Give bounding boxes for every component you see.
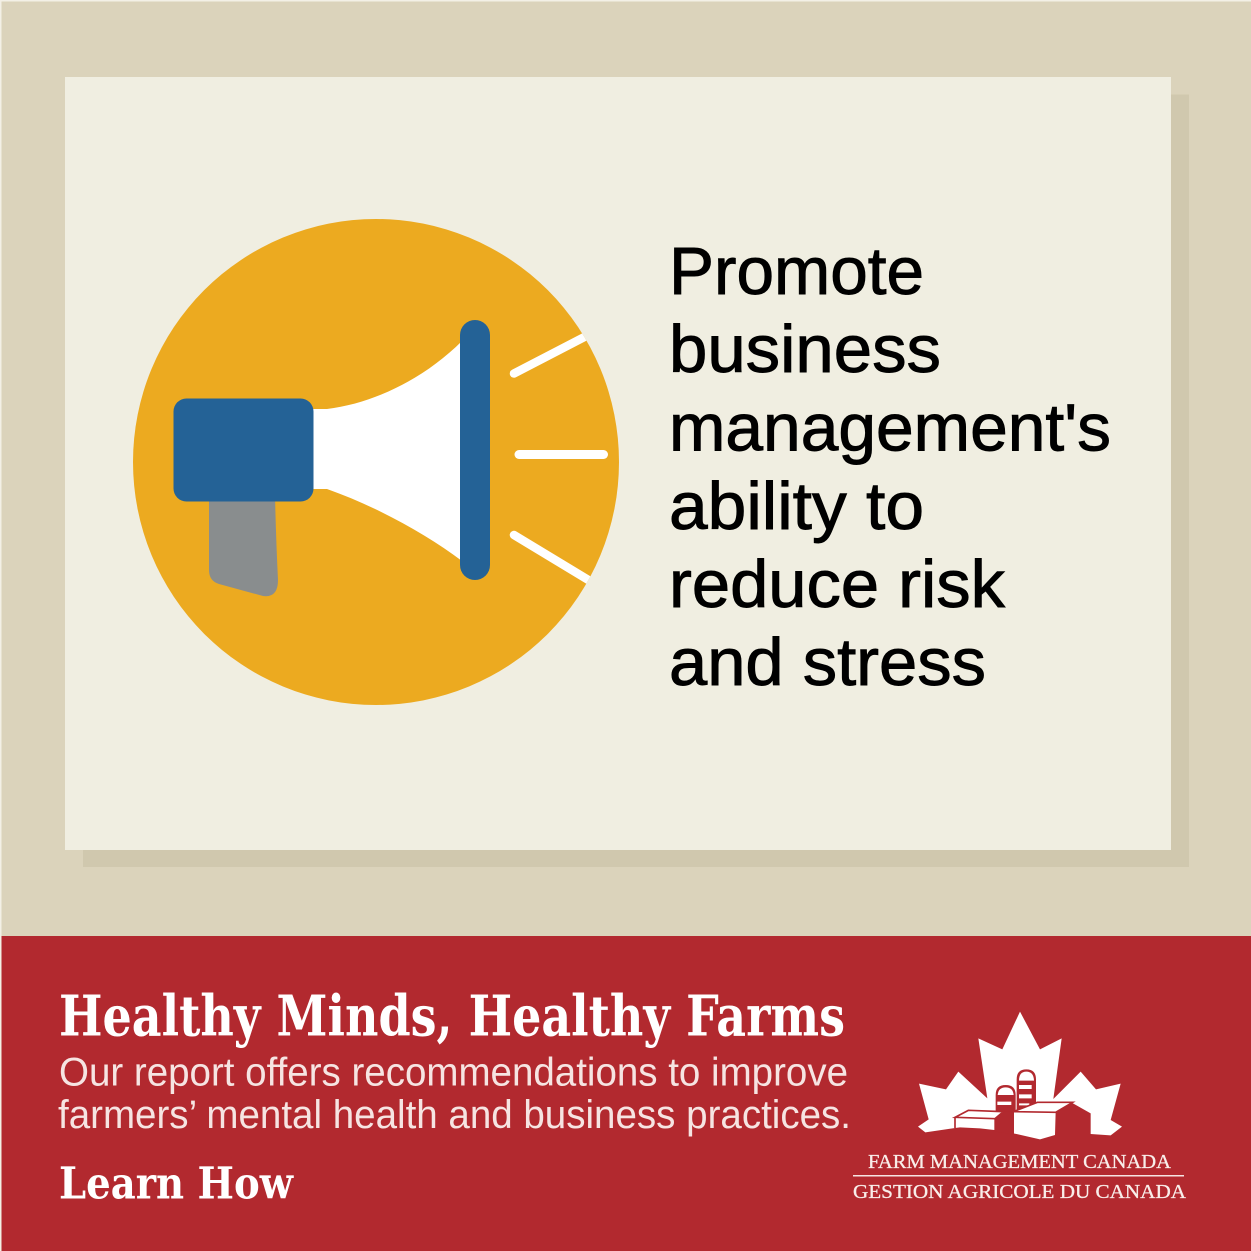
text block: report description: farmers’ mental health and business practices. <box>58 1093 851 1137</box>
icon: megaphone rim <box>460 320 490 580</box>
icon: right barn roof <box>1013 1102 1073 1112</box>
text block: main message <box>669 235 1111 700</box>
text block: main message: management's <box>669 392 1111 466</box>
panel: message card <box>65 77 1171 850</box>
text block: main message: and stress <box>669 626 986 700</box>
icon: maple leaf with farm buildings <box>918 1012 1122 1139</box>
logo: Farm Management Canada <box>853 1012 1187 1203</box>
icon: sound rays <box>514 332 604 584</box>
panel: card shadow <box>83 94 1189 867</box>
panel: red footer band <box>2 936 1251 1251</box>
text: English organization name: FARM MANAGEMENT CANADA <box>868 1151 1172 1173</box>
text block: report description: Our report offers recommendations to improve <box>59 1050 848 1094</box>
text block: main message: reduce risk <box>669 548 1006 622</box>
icon: silos <box>996 1069 1036 1112</box>
text block: main message: business <box>669 313 941 387</box>
text block: report description <box>58 1050 851 1137</box>
icon: megaphone horn <box>310 341 462 561</box>
icon: silo highlights <box>997 1072 1034 1105</box>
icon: left shed <box>955 1110 1003 1119</box>
icon: gap between buildings <box>994 1110 1014 1135</box>
icon: megaphone body <box>174 398 314 502</box>
call to action: learn how: Learn How <box>59 1158 294 1210</box>
icon: megaphone handle <box>209 495 278 596</box>
icon: orange circle <box>133 219 619 705</box>
text block: main message: ability to <box>669 470 924 544</box>
text: French organization name: GESTION AGRICOLE DU CANADA <box>853 1181 1187 1203</box>
heading: report title: Healthy Minds, Healthy Farms <box>59 984 845 1050</box>
text block: main message: Promote <box>669 235 924 309</box>
icon: megaphone in circle <box>133 219 619 705</box>
